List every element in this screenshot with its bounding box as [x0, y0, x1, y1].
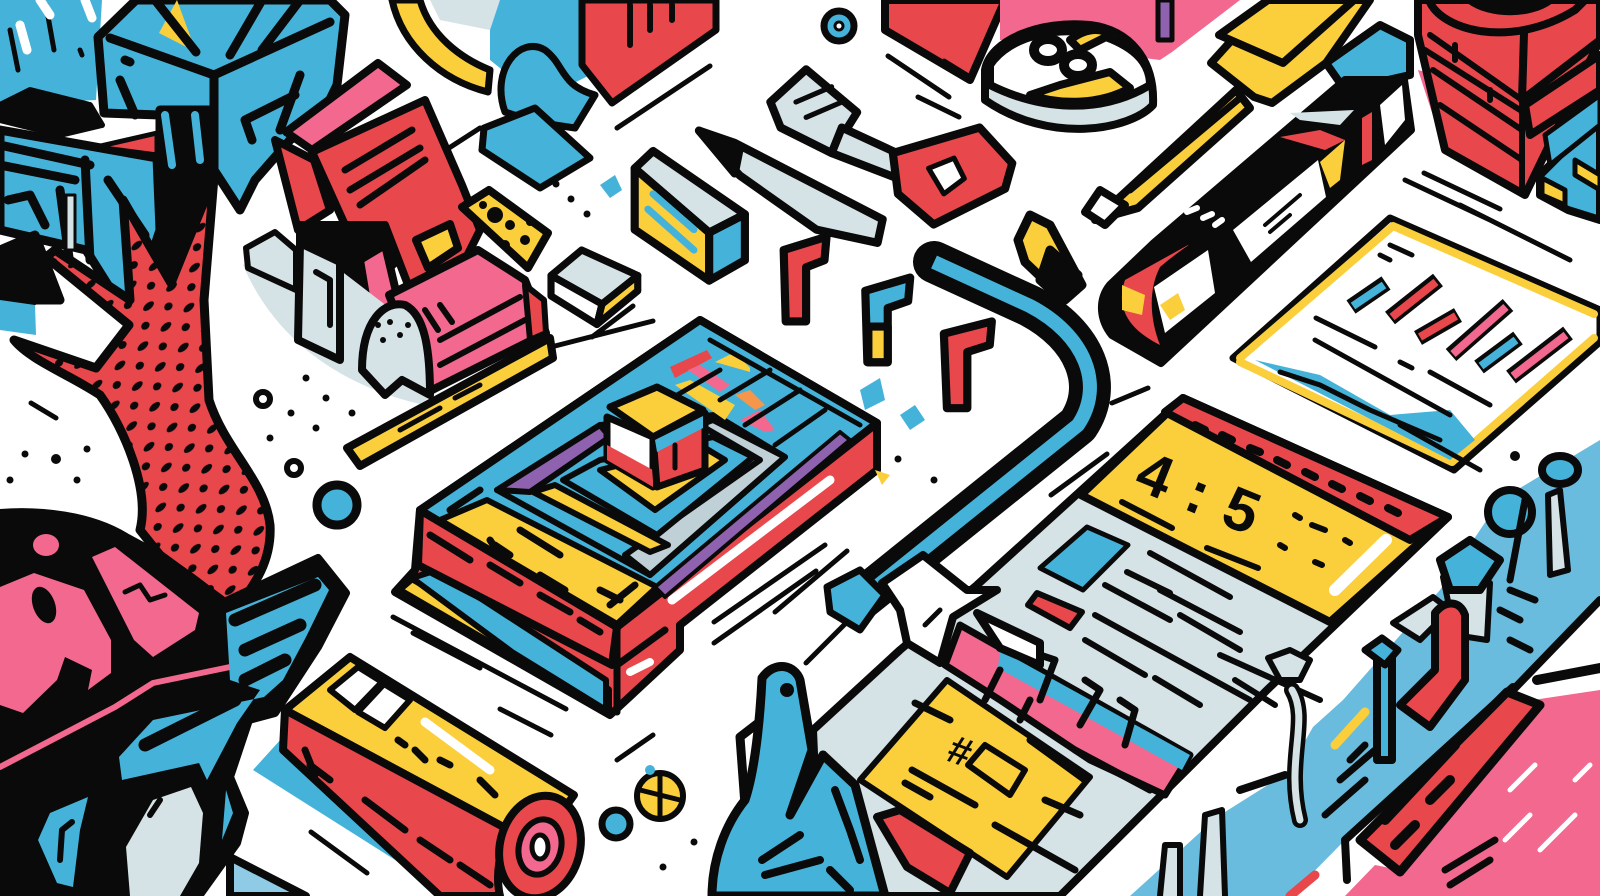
panel: centre stacked platform [395, 320, 877, 715]
chart: bar chart panel [1233, 218, 1600, 470]
panel: top figure building [392, 0, 716, 188]
icon: yellow roll [230, 657, 592, 896]
icon: tape roll [1102, 80, 1411, 363]
panel: top-left blue corner [0, 0, 102, 135]
panel: document with rating: # [942, 727, 978, 776]
panel: document with rating [813, 398, 1448, 896]
yellow ticket [860, 680, 1090, 877]
icon: blue pipe [860, 262, 1090, 600]
icon: three small stacked pegs [784, 237, 992, 408]
icon: bottom hand [712, 666, 885, 896]
rating value: 4:5 [1127, 438, 1288, 555]
chart: red speckled tree [14, 177, 270, 610]
panel: red building [275, 63, 548, 320]
panel: blue tower building [98, 0, 345, 283]
panel: pink barrel hut [362, 250, 546, 395]
panel: top-right brick tower [1418, 0, 1600, 220]
icon: small target ring [824, 11, 854, 41]
icon: small grey box [551, 250, 638, 324]
scattered dots [6, 180, 1520, 870]
icon: cube on platform [607, 387, 705, 487]
panel: left blue building [0, 130, 160, 335]
icon: yellow-blue cube [635, 151, 745, 281]
pink blocks row [945, 625, 1190, 795]
hut dots [375, 319, 411, 343]
panel: bottom-left creature [0, 512, 346, 896]
pipe mouth [827, 570, 885, 630]
icon: top centre dial [885, 0, 1240, 129]
icon: top yellow clamp and pencil [1085, 0, 1410, 225]
panel: bottom-right pink panel [1345, 668, 1600, 896]
concentric rings [497, 415, 785, 575]
icon: small black wrench [1018, 215, 1082, 300]
icon: white glove [882, 555, 997, 663]
panel: grey houses [243, 232, 470, 404]
yellow block speckles [479, 201, 534, 250]
coloured specks [600, 175, 925, 775]
panel: right side blue machinery [1130, 440, 1600, 896]
decorative dots and dashes [256, 392, 683, 838]
icon: yellow ruler bar [347, 338, 553, 466]
icon: top pencil and grey tools [699, 69, 1012, 243]
